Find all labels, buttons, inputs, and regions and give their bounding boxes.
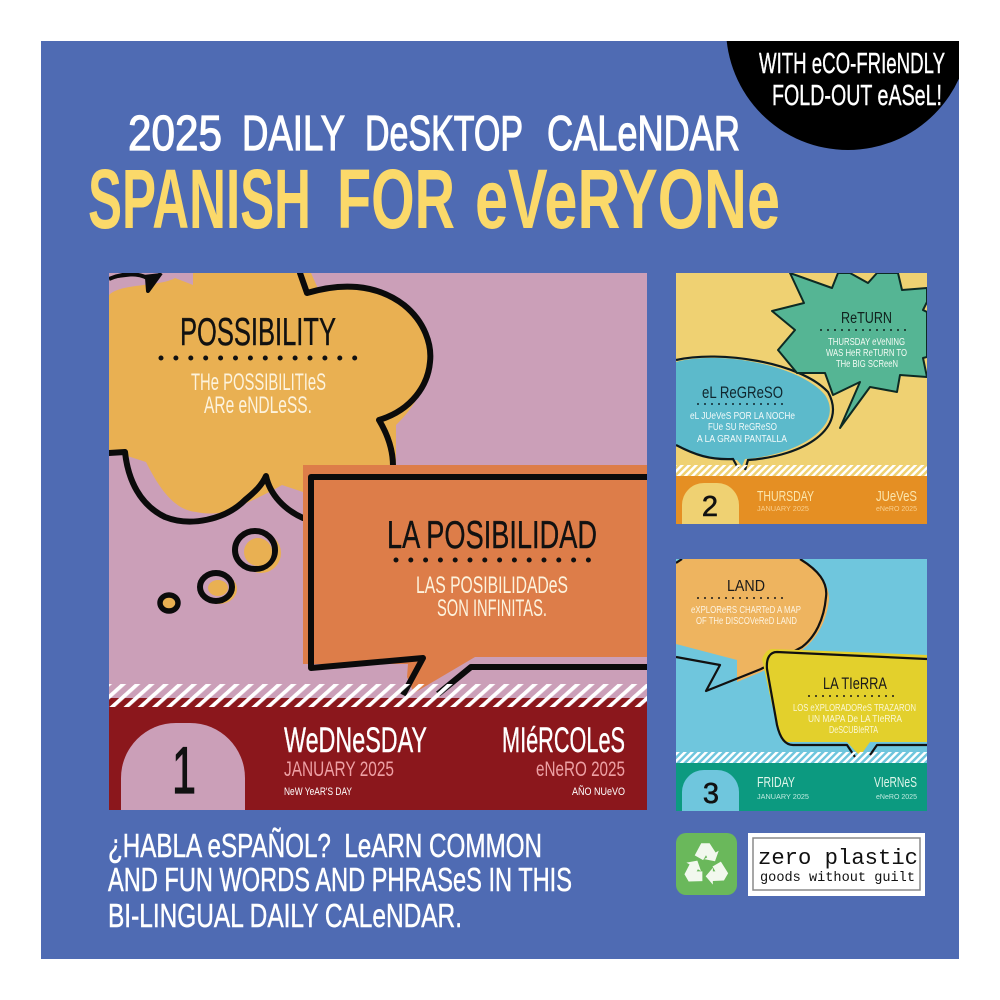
spanish word: LAS POSIBILIDADeS <box>416 572 568 599</box>
english date <box>757 777 809 799</box>
spanish word: A LA GRAN PANTALLA <box>697 433 787 445</box>
english date: JANUARY 2025 <box>757 792 809 801</box>
speech bubble: el regreso <box>676 357 833 470</box>
spanish word <box>794 678 916 733</box>
spanish date: eNeRO 2025 <box>536 758 625 781</box>
english word: eXPLOReRS CHARTeD A MAP <box>691 604 801 616</box>
english date: THURSDAY <box>757 488 814 505</box>
title: spanish for everyone: eVeRYONe <box>475 152 780 246</box>
footer band <box>676 763 927 811</box>
english date: FRIDAY <box>757 774 795 791</box>
spanish word: LA TIeRRA <box>823 674 887 693</box>
date tab: 2 <box>702 491 718 523</box>
title: calendar name: 2025 <box>128 107 222 161</box>
date tab: 3 <box>703 778 719 810</box>
date tab <box>682 483 739 524</box>
english word: LAND <box>727 578 765 595</box>
english date: JANUARY 2025 <box>757 504 809 513</box>
english date: WeDNeSDAY <box>284 721 427 760</box>
title: spanish for everyone: SPANISH <box>88 152 311 246</box>
spanish word: SON INFINITAS. <box>437 595 547 622</box>
spanish word: LA POSIBILIDAD <box>387 514 597 557</box>
english date <box>284 727 427 795</box>
english word: ReTURN <box>841 310 892 327</box>
badge: eco-friendly easel <box>726 41 959 150</box>
speech bubble: la tierra <box>762 649 927 757</box>
panel: calendar page day 3 <box>676 559 927 811</box>
spanish date: JUeVeS <box>876 488 917 505</box>
spanish word <box>389 520 596 616</box>
panel: main calendar page day 1 <box>109 273 647 810</box>
english date: NeW YeAR'S DAY <box>284 786 352 798</box>
logo: zero plastic: zero plastic <box>758 846 918 871</box>
title: calendar name: DeSKTOP <box>365 107 523 161</box>
spanish word: UN MAPA De LA TIeRRA <box>808 713 902 725</box>
title: spanish for everyone: FOR <box>337 152 455 246</box>
english word: OF THe DISCOVeReD LAND <box>696 615 797 627</box>
description text <box>108 827 572 934</box>
english date <box>757 491 814 511</box>
spanish word <box>690 386 795 442</box>
starburst: return <box>772 273 927 428</box>
english word: THe BIG SCReeN <box>836 358 898 370</box>
spanish date: MIéRCOLeS <box>502 721 625 760</box>
speech box <box>303 465 647 695</box>
description text: AND FUN WORDS AND PHRASeS IN THIS <box>108 861 572 898</box>
spanish word: FUe SU ReGReSO <box>708 421 777 433</box>
spanish date <box>874 777 917 799</box>
title: calendar name: CALeNDAR <box>547 107 740 161</box>
logo: zero plastic <box>748 833 925 896</box>
icon: recycling <box>676 833 737 895</box>
english word <box>691 580 801 624</box>
spanish word: eL JUeVeS POR LA NOCHe <box>690 410 795 422</box>
english word: POSSIBILITY <box>180 311 336 354</box>
footer band <box>676 476 927 524</box>
title: calendar name: DAILY <box>242 107 345 161</box>
description text: BI-LINGUAL DAILY CALeNDAR. <box>108 897 462 934</box>
spanish date: eNeRO 2025 <box>876 504 917 513</box>
spanish date <box>504 726 625 795</box>
title: spanish for everyone <box>88 152 780 246</box>
thought bubbles <box>160 531 281 611</box>
spanish word: LOS eXPLORADOReS TRAZARON <box>793 702 916 714</box>
spanish word: eL ReGReSO <box>702 383 783 402</box>
title: calendar name <box>128 107 740 161</box>
spanish date: VIeRNeS <box>874 774 917 791</box>
logo: zero plastic: goods without guilt <box>760 871 915 886</box>
footer band <box>109 698 647 810</box>
english word <box>161 311 355 419</box>
spanish date <box>876 491 917 511</box>
description text: ¿HABLA eSPAÑOL? LeARN COMMON <box>108 827 542 864</box>
english word: THe POSSIBILITIeS <box>191 369 326 396</box>
panel: calendar page day 2 <box>676 273 927 524</box>
date tab <box>682 770 739 811</box>
english word: THURSDAY eVeNING <box>828 336 905 348</box>
english word: WAS HeR ReTURN TO <box>826 347 907 359</box>
speech bubble: land <box>676 559 829 691</box>
spanish date: eNeRO 2025 <box>876 792 917 801</box>
english word <box>820 312 907 367</box>
spanish word: DeSCUBIeRTA <box>829 724 878 736</box>
english word: ARe eNDLeSS. <box>204 392 312 419</box>
spanish date: AÑO NUeVO <box>572 785 625 798</box>
date tab: 1 <box>172 733 196 807</box>
english date: JANUARY 2025 <box>284 758 394 781</box>
thought cloud <box>109 273 430 522</box>
date tab <box>121 723 245 810</box>
